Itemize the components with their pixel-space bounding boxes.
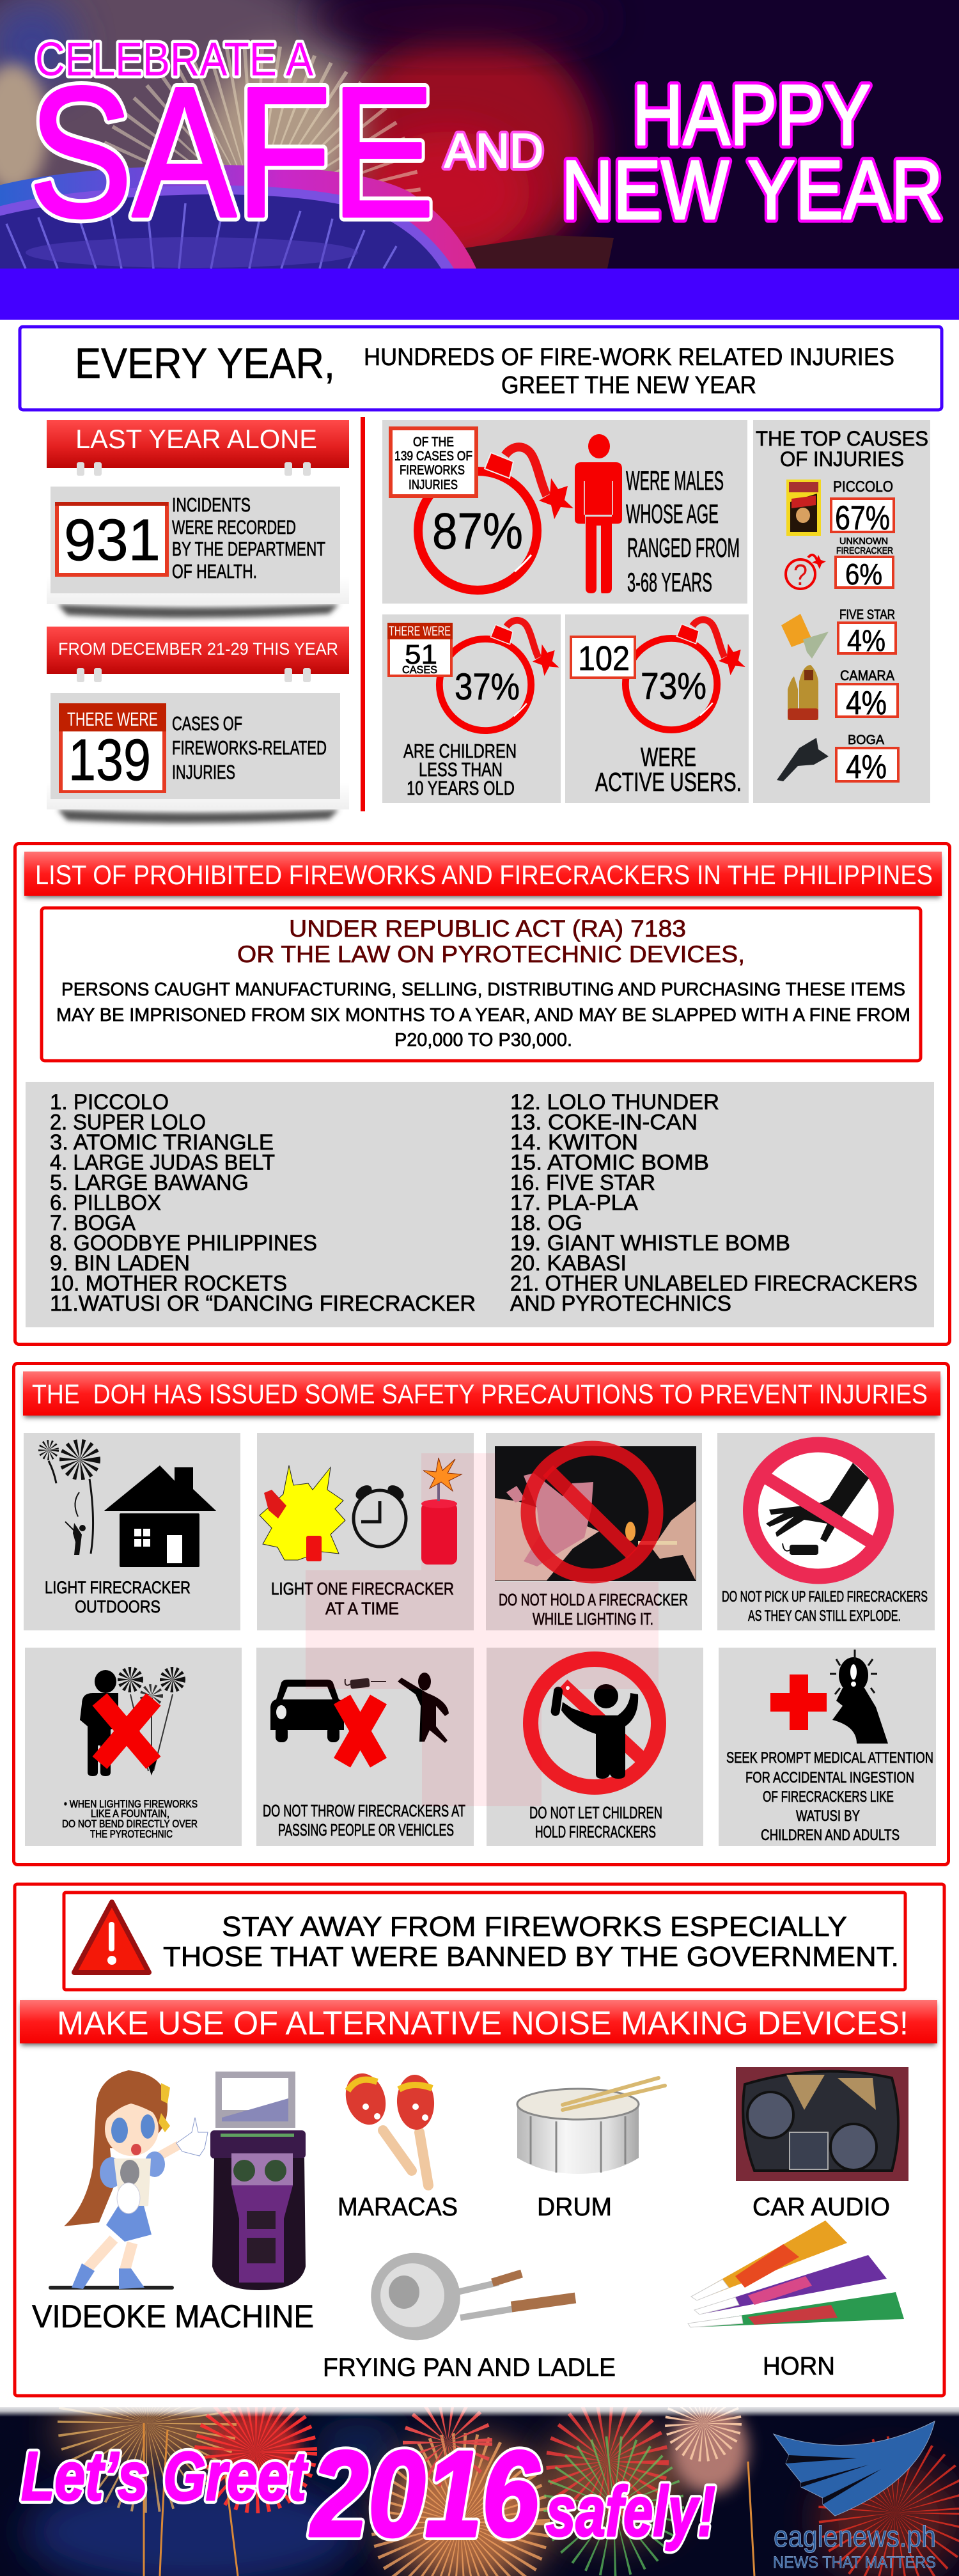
icon: alarm clock (353, 1483, 407, 1547)
tile: do not throw firecrackers (256, 1648, 474, 1846)
law text: PERSONS CAUGHT MANUFACTURING, SELLING, DISTRIBUTING AND PURCHASING THESE ITEMS (61, 980, 905, 1000)
51 cases box: THERE WERE (389, 624, 451, 639)
section header bar: MAKE USE OF ALTERNATIVE NOISE MAKING DEVICES! (57, 2005, 908, 2042)
tile caption: DO NOT HOLD A FIRECRACKER (499, 1590, 688, 1609)
icon: bomb ring (625, 620, 745, 730)
label: horn: HORN (763, 2352, 835, 2380)
icon: car audio (736, 2067, 908, 2181)
title: safe: SAFE (29, 49, 435, 256)
law text: P20,000 TO P30,000. (394, 1030, 572, 1050)
purple band (0, 269, 959, 320)
139 number box: 139 (68, 728, 151, 793)
translucent pink cross overlay (306, 1453, 659, 1806)
title: happy: HAPPY (632, 68, 871, 163)
label: drum: DRUM (537, 2193, 612, 2221)
cause: boga: BOGA (848, 733, 884, 747)
tile caption: THE PYROTECHNIC (90, 1828, 173, 1840)
icon: fireworks and house (43, 1445, 216, 1567)
icon: prohibited child with firecracker (531, 1659, 659, 1787)
51 cases box: CASES (402, 664, 437, 676)
icon: bomb ring (418, 447, 573, 590)
list column two: AND PYROTECHNICS (510, 1292, 731, 1316)
title: safe: SAFE (29, 49, 435, 256)
cause: piccolo: 67% (835, 499, 890, 537)
republic act box (42, 908, 921, 1061)
card: last year alone (47, 420, 349, 618)
closing message: safely: safely! (546, 2472, 715, 2551)
tile caption: OF FIRECRACKERS LIKE (763, 1788, 894, 1806)
males text: RANGED FROM (627, 533, 740, 563)
card header: LAST YEAR ALONE (75, 424, 317, 454)
panel: 73 percent active users (565, 614, 749, 803)
list column one: 10. MOTHER ROCKETS (50, 1271, 287, 1295)
tile caption: LIKE A FOUNTAIN, (91, 1807, 169, 1820)
cause: five star: FIVE STAR (839, 607, 895, 622)
icon: frying pan and ladle (359, 2240, 575, 2353)
warning text (163, 1911, 899, 1972)
panel: doh safety precautions (14, 1363, 949, 1864)
cause: unknown firecracker: ? (793, 558, 807, 591)
icon: medical cross and head (770, 1650, 888, 1744)
of the 139 cases box: FIREWORKS (400, 463, 465, 478)
list column two: 14. KWITON (510, 1130, 638, 1155)
intro text: HUNDREDS OF FIRE-WORK RELATED INJURIES (364, 344, 894, 371)
of the 139 cases box: 139 CASES OF (394, 449, 472, 464)
tile caption (499, 1590, 688, 1628)
list column one (50, 1090, 476, 1316)
photo: hands lighting firecrackers (495, 1446, 696, 1581)
icon: bomb ring (439, 620, 559, 731)
tile caption: AT A TIME (325, 1599, 399, 1618)
icon: burst (260, 1465, 345, 1561)
incidents text: OF HEALTH. (172, 560, 257, 582)
card: december 21-29 (47, 627, 349, 824)
tile caption (529, 1804, 662, 1841)
tile caption: DO NOT LET CHILDREN (529, 1804, 662, 1822)
icon: male figure (575, 434, 622, 593)
cause: unknown firecracker: FIRECRACKER (836, 545, 893, 556)
card header (47, 627, 349, 682)
closing message: 2016: 2016 (309, 2426, 540, 2562)
footer: fireworks with closing message (0, 2407, 959, 2576)
panel heading: THE TOP CAUSES (756, 427, 928, 450)
list column two: 15. ATOMIC BOMB (510, 1151, 709, 1175)
children text: LESS THAN (419, 758, 503, 781)
139 number box (59, 703, 166, 793)
panel: 87 percent males (382, 420, 747, 604)
logo text: NEWS THAT MATTERS (773, 2554, 936, 2572)
cause: piccolo: PICCOLO (833, 478, 893, 496)
tile caption: OUTDOORS (75, 1597, 160, 1616)
tile caption (263, 1802, 465, 1839)
incidents text (172, 494, 325, 582)
cause: camara: CAMARA (840, 667, 894, 683)
law heading (237, 916, 745, 967)
cases text: CASES OF (172, 712, 242, 735)
children text: ARE CHILDREN (403, 740, 517, 762)
73 percent: 73% (641, 666, 706, 707)
intro text (364, 344, 894, 399)
red vertical divider (361, 417, 365, 811)
title: and: AND (444, 124, 543, 178)
tile caption: LIGHT FIRECRACKER (45, 1578, 191, 1597)
cause: camara: 4% (846, 685, 887, 722)
logo text (773, 2520, 936, 2572)
tile: light firecracker outdoors (24, 1433, 240, 1630)
card header: FROM DECEMBER 21-29 THIS YEAR (58, 639, 338, 659)
label: videoke machine: VIDEOKE MACHINE (32, 2299, 314, 2334)
label: frying pan and ladle: FRYING PAN AND LADLE (323, 2354, 616, 2382)
title: happy: HAPPY (632, 68, 871, 163)
active users text (595, 742, 742, 797)
list column two: 13. COKE-IN-CAN (510, 1110, 698, 1134)
tile: seek prompt medical attention (719, 1648, 936, 1846)
51 cases box (387, 623, 453, 677)
card header (47, 420, 349, 476)
of the 139 cases box: INJURIES (409, 478, 458, 492)
list column two: 20. KABASI (510, 1251, 627, 1276)
panel: stay away and alternatives (15, 1884, 944, 2396)
incidents text: BY THE DEPARTMENT (172, 538, 325, 560)
list column two: 21. OTHER UNLABELED FIRECRACKERS (510, 1271, 917, 1295)
list column two: 19. GIANT WHISTLE BOMB (510, 1231, 790, 1256)
list column one: 11.WATUSI OR “DANCING FIRECRACKER (50, 1292, 476, 1316)
cause: five star (781, 607, 896, 659)
closing message: safely: safely! (546, 2472, 715, 2551)
tile caption: WHILE LIGHTING IT. (533, 1609, 653, 1628)
children text: 10 YEARS OLD (407, 777, 515, 799)
section header bar (24, 852, 942, 898)
panel: top causes of injuries (753, 420, 930, 803)
tile caption: HOLD FIRECRACKERS (535, 1823, 656, 1841)
males text: 3-68 YEARS (627, 567, 712, 597)
panel: list of prohibited fireworks (15, 844, 950, 1344)
of the 139 cases box (391, 428, 476, 496)
list column one: 2. SUPER LOLO (50, 1110, 206, 1134)
section header bar (23, 1371, 940, 1417)
warning text: THOSE THAT WERE BANNED BY THE GOVERNMENT. (163, 1941, 899, 1972)
list column two: 16. FIVE STAR (510, 1171, 655, 1195)
law heading: OR THE LAW ON PYROTECHNIC DEVICES, (237, 941, 745, 967)
law text (56, 980, 910, 1050)
931 number box: 931 (64, 508, 160, 573)
icon: drum (517, 2078, 665, 2174)
cause: piccolo (786, 478, 894, 537)
panel: 37 percent children (382, 614, 561, 803)
list column two: 18. OG (510, 1211, 582, 1235)
panel heading (756, 427, 928, 471)
list column one: 3. ATOMIC TRIANGLE (50, 1130, 274, 1155)
icon: car, thrower and red x (270, 1673, 449, 1763)
icon: party horns (688, 2221, 904, 2327)
cause: boga: 4% (846, 749, 887, 786)
closing message: let's greet: Let’s Greet (21, 2437, 308, 2515)
logo text: eaglenews.ph (774, 2520, 936, 2553)
icon: videoke machine (210, 2072, 306, 2290)
cause: unknown firecracker: UNKNOWN (839, 536, 888, 547)
tile: do not pick up failed firecrackers (717, 1433, 935, 1630)
tile: do not bend over pyrotechnic (25, 1648, 242, 1846)
list column two: 12. LOLO THUNDER (510, 1090, 719, 1114)
139 number box: THERE WERE (67, 709, 158, 730)
logo: eagle wing (774, 2421, 935, 2516)
list column one: 4. LARGE JUDAS BELT (50, 1151, 275, 1175)
intro text: GREET THE NEW YEAR (501, 372, 756, 399)
cause: camara (788, 665, 898, 722)
cases text: FIREWORKS-RELATED (172, 737, 327, 759)
tile caption: DO NOT BEND DIRECTLY OVER (62, 1818, 198, 1830)
tile caption: PASSING PEOPLE OR VEHICLES (278, 1822, 454, 1839)
gray panel (51, 487, 340, 593)
cause: five star: 4% (847, 623, 885, 657)
icon: man with fountain and red x (80, 1670, 179, 1776)
list column one: 5. LARGE BAWANG (50, 1171, 249, 1195)
label: car audio: CAR AUDIO (752, 2193, 890, 2221)
every year heading: EVERY YEAR, (75, 340, 335, 387)
icon: maracas (339, 2068, 435, 2185)
incidents text: INCIDENTS (172, 494, 251, 516)
icon: prohibition sign (528, 1448, 656, 1576)
icon: prohibited hand (751, 1445, 886, 1577)
tile caption (45, 1578, 191, 1616)
cause: unknown firecracker (786, 536, 893, 591)
warning box (64, 1893, 905, 1990)
active users text: ACTIVE USERS. (595, 767, 742, 797)
list column two: 17. PLA-PLA (510, 1190, 638, 1215)
children text (403, 740, 517, 799)
tile caption: DO NOT THROW FIRECRACKERS AT (263, 1802, 465, 1820)
tile caption (722, 1588, 928, 1625)
list column two (510, 1090, 917, 1316)
closing message: 2016: 2016 (309, 2426, 540, 2562)
list column one: 8. GOODBYE PHILIPPINES (50, 1231, 317, 1256)
tile caption (726, 1749, 933, 1844)
males text: WERE MALES (626, 465, 724, 496)
law text: MAY BE IMPRISONED FROM SIX MONTHS TO A YEAR, AND MAY BE SLAPPED WITH A FINE FROM (56, 1005, 910, 1026)
list column one: 7. BOGA (50, 1211, 136, 1235)
title: celebrate a: CELEBRATE A (35, 33, 314, 86)
icon: videoke girl (49, 2070, 208, 2290)
warning text: STAY AWAY FROM FIREWORKS ESPECIALLY (222, 1911, 847, 1942)
tile caption: • WHEN LIGHTING FIREWORKS (64, 1798, 198, 1810)
list column one: 6. PILLBOX (50, 1190, 161, 1215)
tile caption (62, 1798, 198, 1840)
87 percent: 87% (432, 503, 523, 559)
list column one: 1. PICCOLO (50, 1090, 169, 1114)
males text (626, 465, 740, 597)
incidents text: WERE RECORDED (172, 516, 296, 538)
cause: boga (777, 733, 898, 786)
active users text: WERE (641, 742, 696, 772)
tile: do not let children hold (487, 1648, 703, 1846)
prohibited list panel (26, 1082, 934, 1327)
intro box (20, 327, 942, 410)
tile caption: WATUSI BY (796, 1807, 860, 1825)
tile: one firecracker at a time (257, 1433, 474, 1630)
tile caption: LIGHT ONE FIRECRACKER (271, 1579, 454, 1598)
males text: WHOSE AGE (626, 499, 719, 529)
tile caption (271, 1579, 454, 1618)
list column one: 9. BIN LADEN (50, 1251, 190, 1276)
of the 139 cases box: OF THE (413, 435, 454, 449)
37 percent: 37% (455, 666, 520, 708)
icon: lit firecracker (421, 1458, 462, 1565)
icon: warning triangle (74, 1902, 149, 1972)
label: maracas: MARACAS (338, 2193, 458, 2221)
cases text (172, 712, 327, 783)
panel heading: OF INJURIES (780, 448, 904, 471)
51 cases box: 51 (405, 639, 437, 670)
gray panel (51, 693, 340, 799)
102 box: 102 (578, 639, 630, 678)
closing message: let's greet: Let’s Greet (21, 2437, 308, 2515)
banner: fireworks over stadium with title (0, 0, 959, 294)
tile: do not hold while lighting (486, 1433, 702, 1630)
title: and: AND (444, 124, 543, 178)
tile caption: CHILDREN AND ADULTS (761, 1827, 900, 1844)
law heading: UNDER REPUBLIC ACT (RA) 7183 (289, 916, 686, 942)
cases text: INJURIES (172, 761, 235, 783)
cause: unknown firecracker: 6% (845, 558, 882, 591)
